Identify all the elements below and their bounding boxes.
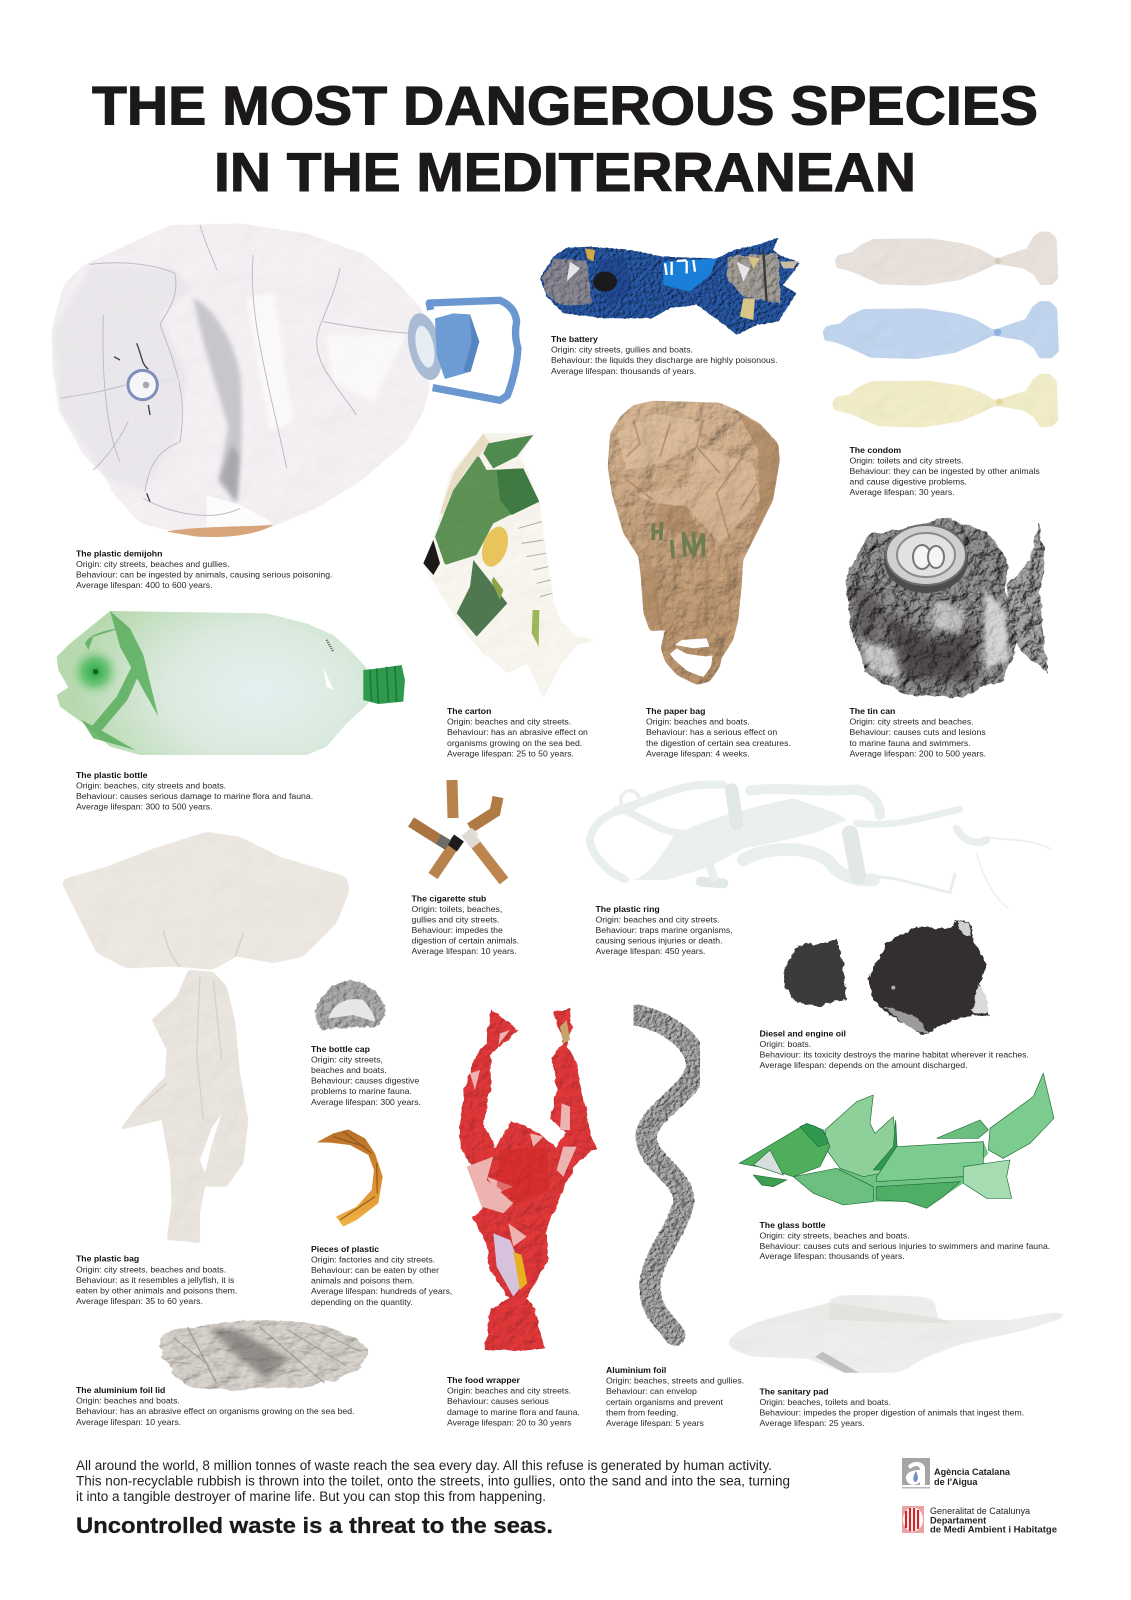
caption: paper bag: Average lifespan: 4 weeks. <box>646 748 750 758</box>
caption: condom: The condom <box>850 445 901 455</box>
caption: plastic ring: Average lifespan: 450 years. <box>596 946 705 956</box>
caption: tin can: Average lifespan: 200 to 500 years. <box>850 748 986 758</box>
caption: aluminium foil: Origin: beaches, streets and gullies. <box>606 1376 744 1386</box>
caption: cigarette stub: gullies and city streets. <box>412 914 499 924</box>
caption: diesel and engine oil: Diesel and engine oil <box>760 1029 846 1039</box>
caption: sanitary pad: Average lifespan: 25 years. <box>760 1418 865 1428</box>
caption: food wrapper: damage to marine flora and fauna. <box>447 1407 580 1417</box>
image: bottle cap <box>315 980 386 1029</box>
caption: diesel and engine oil: Behaviour: its toxicity destroys the marine habitat wherever it reaches. <box>760 1050 1029 1060</box>
condom: beige <box>835 232 1058 286</box>
image: aluminium foil lid <box>160 1320 368 1390</box>
caption: pieces of plastic: depending on the quantity. <box>311 1297 413 1307</box>
bottle base hub <box>128 370 190 400</box>
caption: bottle cap: Average lifespan: 300 years. <box>311 1097 421 1107</box>
caption: plastic bag: Origin: city streets, beaches and boats. <box>76 1264 226 1274</box>
caption: aluminium foil lid: The aluminium foil lid <box>76 1385 165 1395</box>
logo: Agència Catalana de l'Aigua: Agència Catalana <box>934 1467 1011 1477</box>
caption: plastic demijohn: Average lifespan: 400 to 600 years. <box>76 580 213 590</box>
logo: Agència Catalana de l'Aigua <box>902 1458 1011 1488</box>
caption: paper bag: The paper bag <box>646 706 705 716</box>
caption: paper bag: Origin: beaches and boats. <box>646 717 750 727</box>
caption: glass bottle: Behaviour: causes cuts and serious injuries to swimmers and marine fauna. <box>760 1241 1050 1251</box>
caption: aluminium foil lid: Behaviour: has an abrasive effect on organisms growing on the sea bed. <box>76 1406 354 1416</box>
image: carton <box>423 433 598 698</box>
caption: plastic bottle: Average lifespan: 300 to 500 years. <box>76 802 213 812</box>
caption: condom: Origin: toilets and city streets. <box>850 455 963 465</box>
caption: tin can: The tin can <box>850 706 895 716</box>
caption: cigarette stub: Average lifespan: 10 years. <box>412 946 517 956</box>
caption: condom: Average lifespan: 30 years. <box>850 487 955 497</box>
caption: pieces of plastic: Behaviour: can be eaten by other <box>311 1265 439 1275</box>
caption: carton: Behaviour: has an abrasive effect on <box>447 727 588 737</box>
caption: aluminium foil: Average lifespan: 5 years <box>606 1418 705 1428</box>
caption: plastic bottle: Origin: beaches, city streets and boats. <box>76 780 226 790</box>
caption: plastic ring: causing serious injuries or death. <box>596 936 723 946</box>
image: plastic ring <box>590 784 1050 908</box>
image: pieces of plastic <box>317 1129 383 1227</box>
caption: pieces of plastic: animals and poisons them. <box>311 1276 414 1286</box>
image: sanitary pad <box>727 1295 1069 1373</box>
caption: tin can: Behaviour: causes cuts and lesions <box>850 727 986 737</box>
caption: carton: Average lifespan: 25 to 50 years. <box>447 748 574 758</box>
caption: cigarette stub: The cigarette stub <box>412 893 486 903</box>
caption: aluminium foil lid: Average lifespan: 10 years. <box>76 1417 181 1427</box>
caption: plastic bag: Average lifespan: 35 to 60 years. <box>76 1296 203 1306</box>
caption: sanitary pad: Origin: beaches, toilets and boats. <box>760 1397 891 1407</box>
title: THE MOST DANGEROUS SPECIES <box>92 74 1038 136</box>
caption: battery: The battery <box>551 334 598 344</box>
logo: Generalitat de Catalunya: de Medi Ambient i Habitatge <box>930 1525 1057 1535</box>
caption: diesel and engine oil: Origin: boats. <box>760 1039 811 1049</box>
caption: plastic bottle: Behaviour: causes serious damage to marine flora and fauna. <box>76 791 313 801</box>
caption: tin can: to marine fauna and swimmers. <box>850 738 971 748</box>
caption: sanitary pad: Behaviour: impedes the proper digestion of animals that ingest them. <box>760 1407 1024 1417</box>
logo: Generalitat de Catalunya: Departament <box>930 1515 986 1525</box>
caption: diesel and engine oil: Average lifespan: depends on the amount discharged. <box>760 1060 968 1070</box>
condom: blue <box>823 301 1059 359</box>
caption: food wrapper: Average lifespan: 20 to 30 years <box>447 1417 572 1427</box>
caption: food wrapper: Origin: beaches and city streets. <box>447 1386 571 1396</box>
caption: carton: organisms growing on the sea bed. <box>447 738 582 748</box>
caption: condom: Behaviour: they can be ingested by other animals <box>850 466 1040 476</box>
image: diesel and engine oil <box>783 920 988 1035</box>
caption: carton: Origin: beaches and city streets. <box>447 717 571 727</box>
caption: plastic ring: The plastic ring <box>596 904 660 914</box>
intro paragraph: it into a tangible destroyer of marine life. But you can stop this from happening. <box>76 1489 546 1504</box>
caption: food wrapper: The food wrapper <box>447 1375 520 1385</box>
caption: aluminium foil: certain organisms and prevent <box>606 1397 723 1407</box>
caption: tin can: Origin: city streets and beaches. <box>850 717 974 727</box>
caption: glass bottle: Average lifespan: thousands of years. <box>760 1251 905 1261</box>
caption: food wrapper: Behaviour: causes serious <box>447 1396 550 1406</box>
caption: cigarette stub: Behaviour: impedes the <box>412 925 503 935</box>
caption: cigarette stub: Origin: toilets, beaches, <box>412 904 502 914</box>
intro paragraph: This non-recyclable rubbish is thrown into the toilet, onto the streets, into gullies, onto the sand and into the sea, turning <box>76 1474 790 1488</box>
caption: aluminium foil: Aluminium foil <box>606 1365 666 1375</box>
caption: plastic bag: eaten by other animals and poisons them. <box>76 1286 237 1296</box>
caption: bottle cap: Behaviour: causes digestive <box>311 1076 419 1086</box>
caption: pieces of plastic: Average lifespan: hundreds of years, <box>311 1286 452 1296</box>
caption: pieces of plastic: Pieces of plastic <box>311 1244 379 1254</box>
intro paragraph: All around the world, 8 million tonnes of waste reach the sea every day. All this refuse is generated by human activity. <box>76 1458 772 1473</box>
title: IN THE MEDITERRANEAN <box>214 141 916 203</box>
caption: condom: and cause digestive problems. <box>850 477 967 487</box>
image: paper bag <box>608 401 780 685</box>
image: plastic bottle <box>57 611 405 755</box>
title <box>92 74 1038 203</box>
caption: plastic demijohn: The plastic demijohn <box>76 548 162 558</box>
caption: plastic ring: Behaviour: traps marine organisms, <box>596 925 733 935</box>
caption: plastic bottle: The plastic bottle <box>76 770 148 780</box>
caption: paper bag: Behaviour: has a serious effect on <box>646 727 777 737</box>
image: plastic demijohn <box>52 223 518 538</box>
caption: cigarette stub: digestion of certain animals. <box>412 936 519 946</box>
logo: Agència Catalana de l'Aigua: de l'Aigua <box>934 1477 978 1487</box>
condom: yellow <box>832 374 1058 428</box>
caption: plastic demijohn: Origin: city streets, beaches and gullies. <box>76 559 230 569</box>
caption: aluminium foil: Behaviour: can envelop <box>606 1386 697 1396</box>
caption: bottle cap: problems to marine fauna. <box>311 1086 412 1096</box>
caption: glass bottle: The glass bottle <box>760 1220 826 1230</box>
slogan: Uncontrolled waste is a threat to the seas. <box>76 1513 553 1538</box>
caption: plastic bag: The plastic bag <box>76 1254 139 1264</box>
image: tin can <box>846 518 1047 697</box>
caption: plastic ring: Origin: beaches and city streets. <box>596 915 720 925</box>
caption: sanitary pad: The sanitary pad <box>760 1387 829 1397</box>
image: battery <box>540 238 800 335</box>
image: plastic bag <box>60 832 350 1243</box>
image: condoms <box>823 232 1059 428</box>
image: food wrapper <box>460 1009 596 1350</box>
intro paragraph <box>76 1458 790 1504</box>
caption: battery: Origin: city streets, gullies and boats. <box>551 345 693 355</box>
caption: glass bottle: Origin: city streets, beaches and boats. <box>760 1230 910 1240</box>
logo: Generalitat de Catalunya: Generalitat de Catalunya <box>930 1506 1031 1516</box>
caption: carton: The carton <box>447 706 491 716</box>
image: aluminium foil <box>637 1015 697 1335</box>
caption: aluminium foil lid: Origin: beaches and boats. <box>76 1396 180 1406</box>
caption: battery: Behaviour: the liquids they discharge are highly poisonous. <box>551 355 778 365</box>
caption: plastic bag: Behaviour: as it resembles a jellyfish, it is <box>76 1275 235 1285</box>
demijohn neck and blue cap <box>402 300 518 400</box>
image: cigarette stubs <box>411 780 504 881</box>
caption: pieces of plastic: Origin: factories and city streets. <box>311 1255 435 1265</box>
caption: paper bag: the digestion of certain sea creatures. <box>646 738 791 748</box>
logo: Generalitat de Catalunya <box>902 1506 1057 1535</box>
image: glass bottle <box>739 1073 1054 1208</box>
caption: bottle cap: Origin: city streets, <box>311 1055 383 1065</box>
caption: aluminium foil: them from feeding. <box>606 1407 678 1417</box>
caption: plastic demijohn: Behaviour: can be ingested by animals, causing serious poisoning. <box>76 570 332 580</box>
caption: bottle cap: beaches and boats. <box>311 1065 387 1075</box>
caption: battery: Average lifespan: thousands of years. <box>551 366 696 376</box>
caption: bottle cap: The bottle cap <box>311 1044 370 1054</box>
